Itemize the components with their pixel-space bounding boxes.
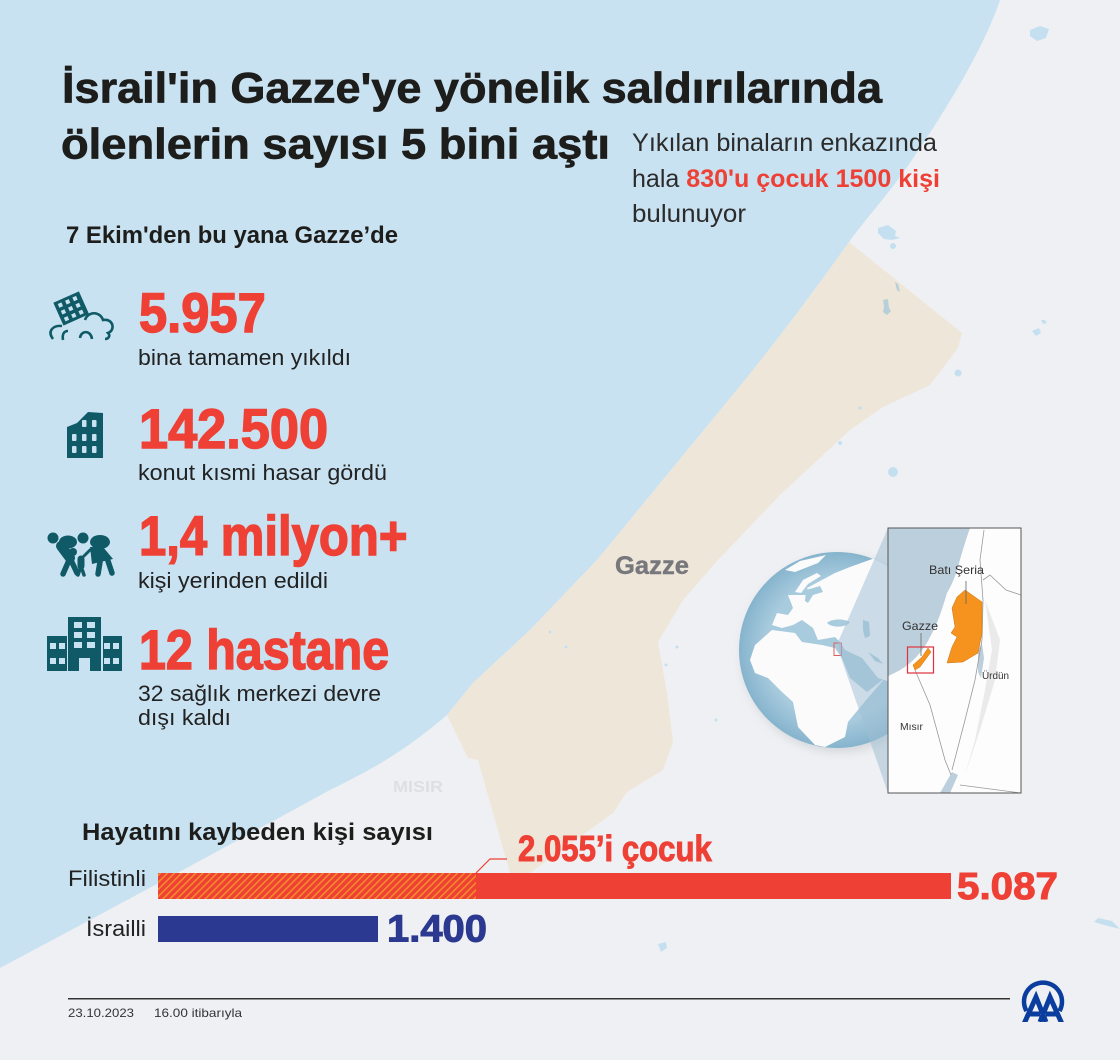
stat: damaged homes <box>67 398 387 485</box>
red sea gulf <box>940 644 984 793</box>
inset labels <box>900 563 1009 733</box>
inset labels: Gazze <box>902 619 938 633</box>
red highlight box <box>908 647 934 673</box>
callout: people under rubble: hala 830'u çocuk 1500 kişi <box>632 165 940 193</box>
value: 5.957 <box>139 283 266 345</box>
leader line <box>476 859 507 873</box>
inset labels: Mısır <box>900 721 923 733</box>
value: 142.500 <box>139 398 328 460</box>
globe shadow <box>742 556 938 752</box>
terrain shading <box>965 600 1000 775</box>
Gaza strip <box>913 648 931 670</box>
icon: hospital <box>47 617 122 671</box>
value: children: 2.055’i çocuk <box>518 830 712 870</box>
title <box>61 64 883 168</box>
value: 1,4 milyon+ <box>139 505 407 568</box>
map decoration: lake on strip <box>883 282 900 315</box>
stat: destroyed buildings <box>51 283 351 370</box>
stat: displaced people <box>48 505 407 593</box>
description: 32 sağlık merkezi devre <box>138 681 381 706</box>
footer date <box>68 1006 242 1020</box>
description: kişi yerinden edildi <box>138 568 328 593</box>
inset labels: Batı Şeria <box>929 563 984 577</box>
logo: AA <box>1024 983 1062 1025</box>
title: ölenlerin sayısı 5 bini aştı <box>61 120 610 168</box>
row label: İsrailli <box>86 916 146 941</box>
title: İsrail'in Gazze'ye yönelik saldırılarında <box>62 64 883 112</box>
description <box>138 681 381 730</box>
bar: Palestinians <box>158 873 951 899</box>
footer date: 23.10.2023 <box>68 1006 134 1020</box>
leader lines <box>921 581 966 656</box>
map label: Mısır: MISIR <box>393 779 443 796</box>
borders <box>915 530 1021 793</box>
bar: children share <box>158 873 476 899</box>
icon: damaged building <box>67 412 103 458</box>
value: Israelis: 1.400 <box>387 908 487 950</box>
section heading: 7 Ekim'den bu yana Gazze’de <box>66 222 398 249</box>
red marker on globe <box>834 643 842 656</box>
projection cone <box>838 528 888 793</box>
description: dışı kaldı <box>138 705 231 730</box>
value: Palestinians: 5.087 <box>957 866 1058 908</box>
inset map <box>888 528 1021 793</box>
map label: Gazze: Gazze <box>615 552 689 580</box>
value: 12 hastane <box>139 620 389 682</box>
inset sea <box>888 528 970 676</box>
row label: Filistinli <box>68 866 146 891</box>
West Bank <box>947 590 982 663</box>
description: konut kısmi hasar gördü <box>138 460 387 485</box>
bar: Israelis <box>158 916 378 942</box>
map decoration: small lakes and islands <box>548 26 1120 952</box>
bar chart: death toll <box>68 819 1058 950</box>
footer line <box>68 998 1010 1000</box>
footer date: 16.00 itibarıyla <box>154 1006 242 1020</box>
inset labels: Ürdün <box>982 670 1009 682</box>
stat: hospitals <box>47 617 389 730</box>
globe <box>739 552 888 748</box>
description: bina tamamen yıkıldı <box>138 345 351 370</box>
map: Gaza strip land <box>447 242 962 873</box>
callout: people under rubble: Yıkılan binaların enkazında <box>632 129 937 157</box>
callout: people under rubble <box>632 129 940 228</box>
chart heading: Hayatını kaybeden kişi sayısı <box>82 819 433 846</box>
icon: displaced people <box>48 532 113 575</box>
icon: collapsing building <box>51 291 113 340</box>
callout: people under rubble: bulunuyor <box>632 200 746 228</box>
